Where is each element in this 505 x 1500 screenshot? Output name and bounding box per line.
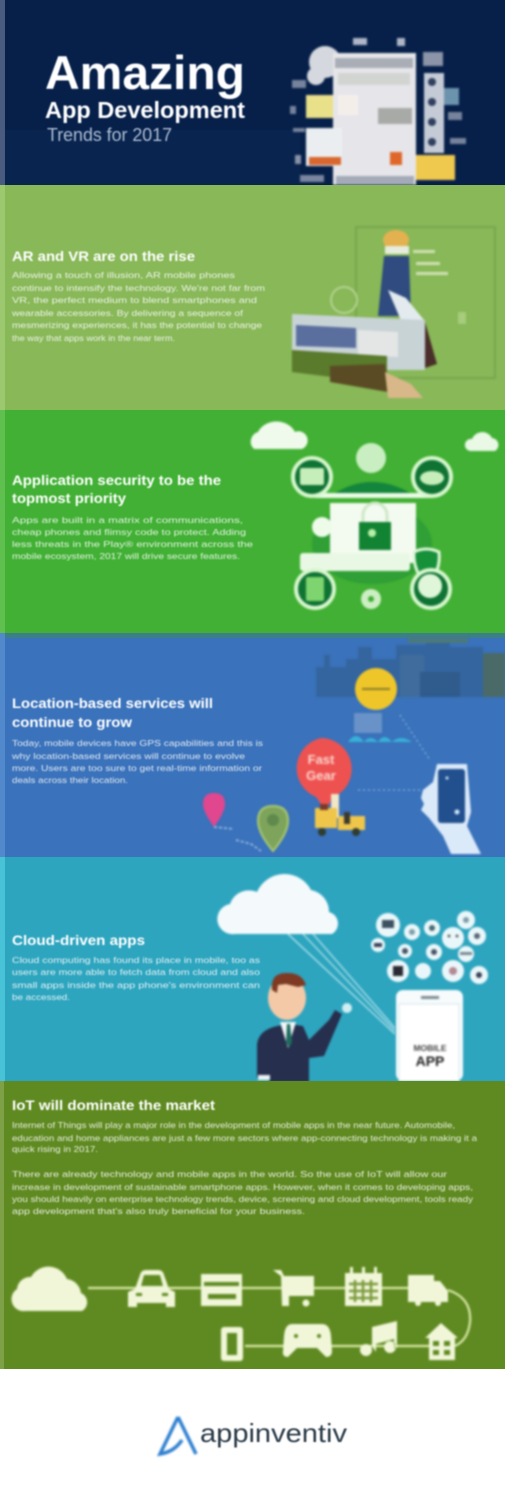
icon: credit card — [201, 1274, 242, 1306]
body text: second paragraph: you should heavily on enterprise technology trends, device, screening and cloud development, tools ready — [12, 1194, 474, 1204]
icon: logo triangle — [160, 1417, 196, 1454]
body text: the way that apps work in the near term. — [12, 333, 175, 343]
illustration: app screens collage — [290, 38, 466, 185]
body text: second paragraph: increase in development of sustainable smartphone apps. However, when it comes to developing apps, — [12, 1182, 473, 1192]
title: Trends for 2017 — [47, 125, 172, 145]
body text: second paragraph — [12, 1169, 474, 1216]
panel: IoT market — [0, 1081, 505, 1369]
title: App Development — [45, 97, 245, 123]
chart: connected devices chain — [11, 1267, 470, 1361]
body text: first paragraph: quick rising in 2017. — [12, 1144, 98, 1154]
panel: location-based services — [0, 633, 505, 857]
body text: Allowing a touch of illusion, AR mobile phones — [12, 270, 235, 280]
icon: music note — [360, 1321, 397, 1356]
heading: Location-based services will — [12, 695, 213, 711]
body text: first paragraph: education and home appliances are just a few more sectors where app-connecting technology is making it a — [12, 1133, 477, 1143]
body text: second paragraph: app development that's also truly beneficial for your business. — [12, 1206, 305, 1216]
heading: IoT will dominate the market — [12, 1097, 215, 1113]
heading: topmost priority — [12, 490, 126, 506]
heading: continue to grow — [12, 714, 132, 730]
illustration: mobile app phone — [396, 990, 463, 1081]
icon: map pins and route — [203, 793, 288, 851]
icon: speech bubble: Fast — [308, 752, 335, 767]
body text: mobile ecosystem, 2017 will drive secure features. — [12, 551, 240, 561]
illustration: cloud security network — [251, 421, 498, 609]
icon: speech bubble: Gear — [306, 768, 336, 783]
body text: small apps inside the app phone's environment can — [12, 980, 260, 990]
icon: gamepad — [283, 1324, 332, 1357]
icon: sun with location marker — [348, 668, 412, 742]
body text: first paragraph — [12, 1120, 477, 1154]
heading: AR and VR are on the rise — [12, 248, 195, 264]
heading — [12, 695, 213, 730]
body text: VR, the perfect medium to blend smartphones and — [12, 295, 257, 305]
icon: truck — [408, 1275, 448, 1306]
icon: speech bubble — [297, 738, 352, 810]
footer: logo — [0, 1369, 505, 1500]
illustration: person with AR view — [292, 227, 495, 398]
body text: deals across their location. — [12, 775, 128, 785]
icon: hand holding phone — [358, 715, 481, 854]
body text: less threats in the Play® environment across the — [12, 539, 253, 549]
body text: Apps are built in a matrix of communications, — [12, 515, 243, 525]
title: Amazing — [45, 46, 245, 99]
illustration: cloud — [217, 874, 395, 1034]
heading: Cloud-driven apps — [12, 932, 145, 948]
body text: why location-based services will continue to evolve — [11, 751, 245, 761]
icon: house — [425, 1323, 458, 1360]
icons: app icon cluster — [371, 911, 488, 984]
panel: header — [0, 0, 505, 185]
icon: calendar — [345, 1267, 382, 1306]
body text: users are more able to fetch data from cloud and also — [12, 967, 260, 977]
illustration: businessman pointing — [257, 973, 352, 1082]
illustration: city skyline — [316, 638, 505, 697]
body text: wearable accessories. By delivering a sequence of — [11, 308, 244, 318]
heading — [12, 472, 221, 506]
icon: delivery scooter — [315, 794, 365, 836]
heading: Application security to be the — [12, 472, 221, 488]
body text — [12, 515, 253, 561]
body text — [11, 738, 263, 785]
title — [45, 46, 245, 145]
body text: second paragraph: There are already technology and mobile apps in the world. So the use of IoT will allow our — [12, 1169, 447, 1179]
panel: AR and VR — [0, 185, 505, 410]
logo text: appinventiv — [200, 1418, 347, 1448]
icon: phone — [221, 1327, 243, 1361]
illustration: mobile app phone: APP — [416, 1053, 444, 1069]
body text: Cloud computing has found its place in mobile, too as — [12, 955, 260, 965]
body text: more. Users are too sure to get real-time information or — [12, 763, 262, 773]
body text: be accessed. — [12, 992, 70, 1002]
icon: car — [128, 1270, 175, 1307]
body text: cheap phones and flimsy code to protect. Adding — [12, 527, 246, 537]
icon: cart — [273, 1270, 314, 1306]
body text — [12, 955, 260, 1002]
body text — [11, 270, 265, 343]
panel: application security — [0, 410, 505, 633]
panel: cloud-driven apps — [0, 857, 505, 1082]
icon: cloud — [11, 1267, 87, 1311]
illustration: mobile app phone: MOBILE — [413, 1043, 447, 1053]
body text: first paragraph: Internet of Things will play a major role in the development of mobile apps in the near future. Automobile, — [12, 1120, 455, 1130]
body text: continue to intensify the technology. We're not far from — [12, 283, 265, 293]
body text: Today, mobile devices have GPS capabilities and this is — [12, 738, 263, 748]
body text: mesmerizing experiences, it has the potential to change — [12, 320, 262, 330]
